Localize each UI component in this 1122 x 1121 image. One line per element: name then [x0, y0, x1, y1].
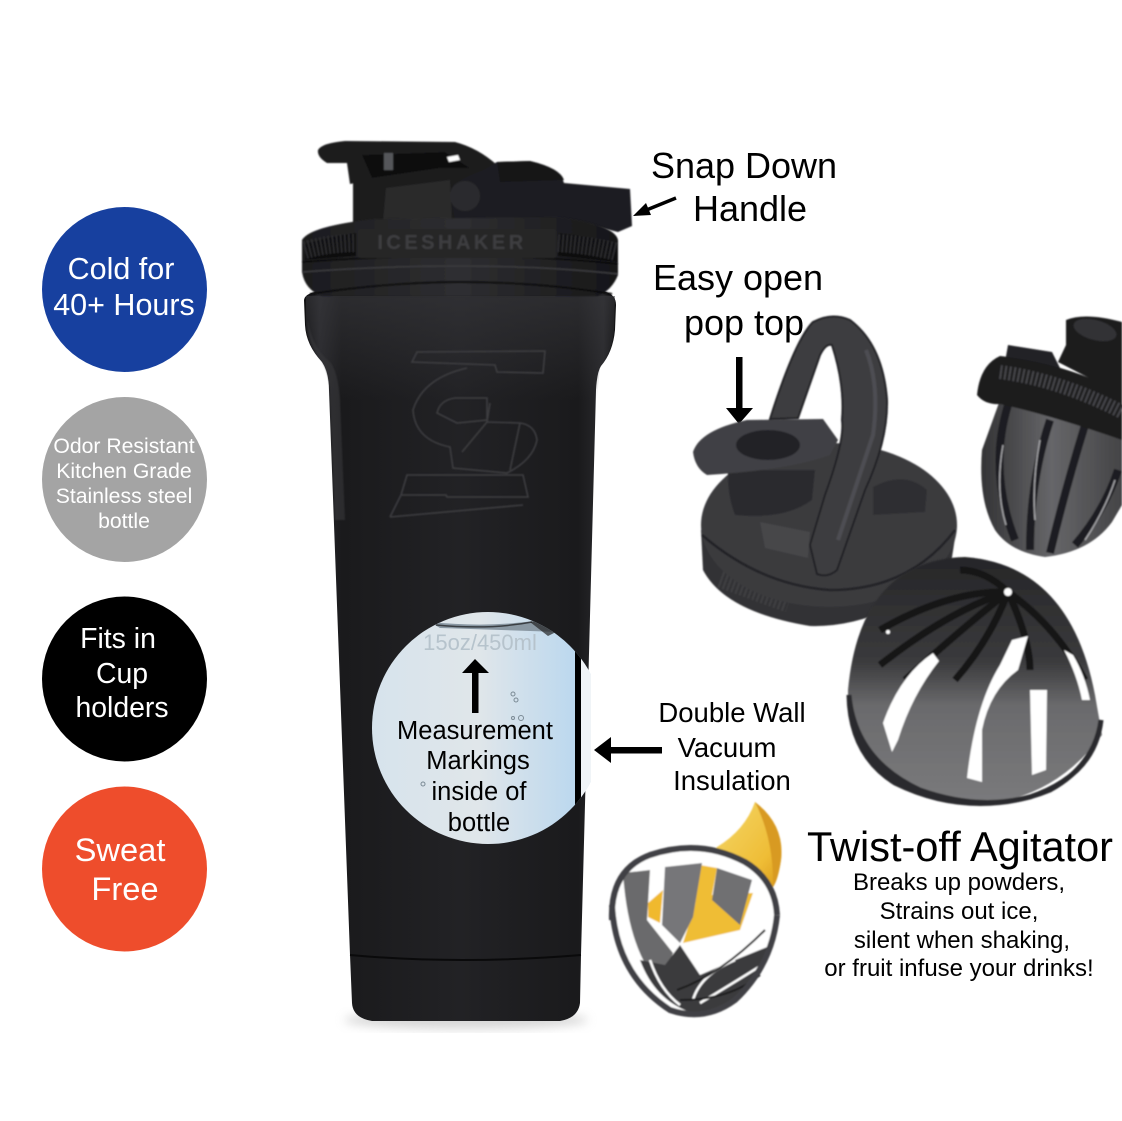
description: agitator uses: or fruit infuse your drinks! [824, 955, 1094, 982]
bottle base seam [350, 955, 581, 960]
label: easy open pop top [653, 257, 823, 424]
faint volume mark: 15oz/450ml [423, 630, 537, 655]
badge: odor resistant stainless steel: bottle [98, 510, 150, 533]
lid handle [770, 316, 887, 575]
twist-off agitator dome [848, 557, 1102, 805]
flip cap [318, 141, 632, 232]
badge: sweat free: Sweat [75, 831, 165, 868]
shoulder highlights [308, 320, 345, 520]
label: easy open pop top: pop top [684, 302, 804, 343]
measurement text: bottle [448, 809, 510, 837]
agitator slots [883, 588, 1090, 782]
badge: fits in cup holders: Fits in [80, 623, 156, 655]
label: easy open pop top: Easy open [653, 257, 823, 298]
embossed logo [390, 351, 545, 517]
badge: fits in cup holders [42, 596, 207, 762]
badge: odor resistant stainless steel: Kitchen Grade [56, 460, 192, 483]
easy-open lid with handle [693, 316, 957, 626]
label: double wall vacuum insulation: Vacuum [678, 732, 776, 763]
label: double wall vacuum insulation: Insulation [673, 765, 791, 796]
label: double wall vacuum insulation: Double Wall [658, 697, 806, 728]
badge: odor resistant stainless steel: Stainless steel [56, 485, 192, 508]
badge: sweat free: Free [91, 870, 159, 907]
lemon wedge [716, 802, 781, 887]
badge: odor resistant stainless steel [42, 397, 207, 562]
badge: fits in cup holders: Cup [96, 658, 148, 690]
upper-right agitator assembly [977, 315, 1122, 557]
shoulder shading [306, 296, 615, 400]
bottle body [304, 292, 616, 1021]
badge: cold for 40+ hours: Cold for [68, 252, 174, 286]
up arrow [462, 659, 489, 713]
lid ring [302, 217, 618, 296]
description: agitator uses: silent when shaking, [854, 927, 1070, 954]
description: agitator uses: Breaks up powders, [853, 869, 1065, 896]
badge: odor resistant stainless steel: Odor Resistant [53, 435, 195, 458]
badge: sweat free [42, 786, 207, 952]
badge: fits in cup holders: holders [75, 692, 169, 724]
bottle [302, 141, 632, 1029]
measurement text: Measurement [397, 717, 553, 745]
measurement text: inside of [432, 778, 527, 806]
agitator cage [612, 848, 777, 1014]
heading: twist-off agitator: Twist-off Agitator [807, 823, 1113, 870]
badge: cold for 40+ hours [42, 207, 207, 372]
label: double wall vacuum insulation [594, 697, 806, 796]
label: snap down handle [633, 145, 837, 229]
badge: cold for 40+ hours: 40+ Hours [53, 288, 195, 322]
cage rim [612, 848, 777, 1014]
measurement callout lens [372, 612, 591, 844]
lid brand name: ICESHAKER [377, 232, 527, 254]
arrow: handle [633, 198, 676, 216]
description: agitator uses: Strains out ice, [880, 898, 1038, 925]
bottle shadow [344, 1011, 588, 1029]
label: snap down handle: Snap Down [651, 145, 837, 186]
arrow: insulation [594, 737, 662, 763]
measurement text: Markings [426, 747, 530, 775]
small agitator with lemon [612, 802, 781, 1014]
label: snap down handle: Handle [693, 188, 807, 229]
arrow: pop top [726, 357, 753, 424]
